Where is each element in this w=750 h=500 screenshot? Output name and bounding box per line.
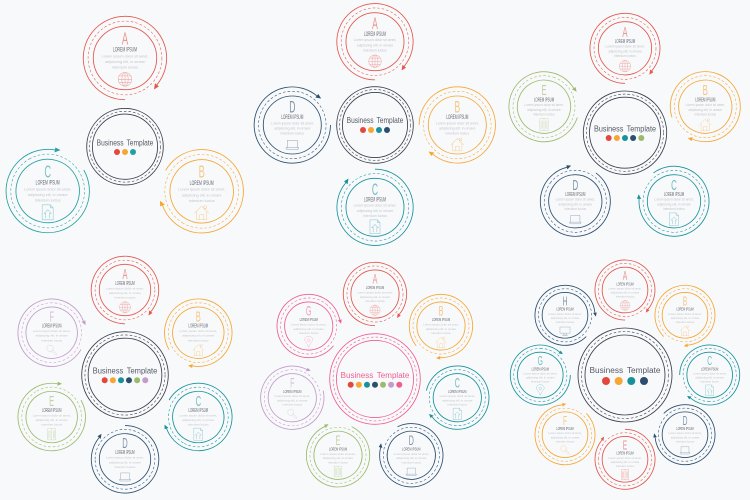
step G [510, 345, 570, 405]
step E: adipiscing elit, in ornare [36, 418, 68, 422]
step D: interdum luctus [402, 460, 422, 464]
step B: B [683, 295, 687, 309]
centre circle 6: Business Template [590, 366, 661, 375]
step A [595, 260, 655, 320]
step F: F [49, 309, 54, 325]
step D: D [289, 97, 295, 116]
step G: adipiscing elit, in ornare [526, 376, 555, 380]
step H [523, 273, 607, 358]
step G: LOREM IPSUM [300, 316, 318, 322]
step F: LOREM IPSUM [283, 388, 301, 394]
step B: interdum luctus [188, 338, 209, 342]
step A: Lorem ipsum dolor sit amet, [354, 38, 396, 42]
step G [264, 281, 353, 371]
step B: LOREM IPSUM [676, 307, 694, 312]
step A: adipiscing elit, in ornare [105, 60, 145, 64]
centre circle 3 [583, 91, 667, 174]
step E: LOREM IPSUM [329, 445, 347, 452]
panel: five-step diagram [500, 13, 749, 250]
step B: adipiscing elit, in ornare [439, 127, 476, 131]
centre circle 1: Business Template [97, 139, 154, 148]
step D: Lorem ipsum dolor sit amet, [394, 452, 429, 456]
step D: LOREM IPSUM [402, 445, 420, 452]
step B: interdum luctus [431, 331, 451, 335]
step C: Lorem ipsum dolor sit amet, [693, 371, 727, 375]
step A: Lorem ipsum dolor sit amet, [357, 290, 393, 294]
step E: Lorem ipsum dolor sit amet, [608, 456, 642, 460]
step B: adipiscing elit, in ornare [689, 108, 722, 112]
step B: interdum luctus [446, 132, 469, 136]
step B: Lorem ipsum dolor sit amet, [668, 312, 702, 316]
step D: LOREM IPSUM [565, 191, 586, 197]
step B: B [439, 304, 443, 319]
panel: six-step diagram [6, 256, 244, 493]
centre circle 4: Business Template [93, 366, 158, 376]
step H: adipiscing elit, in ornare [551, 316, 580, 320]
centre circle 4 [82, 332, 168, 418]
step C: Lorem ipsum dolor sit amet, [354, 204, 396, 208]
step B: Lorem ipsum dolor sit amet, [179, 329, 217, 333]
step B: LOREM IPSUM [432, 316, 450, 322]
step E: interdum luctus [533, 113, 555, 117]
step B: adipiscing elit, in ornare [426, 327, 456, 331]
step A: LOREM IPSUM [113, 47, 137, 54]
centre circle 2: Business Template [347, 116, 404, 125]
step D: Lorem ipsum dolor sit amet, [668, 431, 702, 435]
step B: B [199, 163, 205, 183]
step E: Lorem ipsum dolor sit amet, [524, 103, 564, 107]
step G: G [538, 355, 543, 369]
step E [595, 429, 655, 489]
step C: LOREM IPSUM [448, 388, 466, 394]
step C: interdum luctus [35, 199, 61, 203]
step H: LOREM IPSUM [556, 307, 574, 312]
step D: Lorem ipsum dolor sit amet, [556, 198, 595, 202]
step C: interdum luctus [188, 423, 209, 427]
step C: adipiscing elit, in ornare [442, 399, 473, 403]
step B [661, 63, 749, 151]
step F: Lorem ipsum dolor sit amet, [33, 329, 71, 333]
step C: LOREM IPSUM [664, 191, 684, 197]
step A: A [372, 14, 378, 33]
step D: adipiscing elit, in ornare [274, 127, 311, 131]
step F: interdum luctus [283, 403, 303, 407]
step A: Lorem ipsum dolor sit amet, [605, 45, 645, 49]
step H: Lorem ipsum dolor sit amet, [548, 312, 582, 316]
step E: interdum luctus [41, 423, 63, 427]
step D [369, 413, 454, 498]
step D: Lorem ipsum dolor sit amet, [271, 121, 314, 125]
step B: B [196, 309, 201, 325]
step C: C [707, 355, 712, 369]
step D: LOREM IPSUM [281, 114, 303, 122]
step A: adipiscing elit, in ornare [611, 291, 640, 295]
step A: interdum luctus [363, 48, 387, 52]
step D: adipiscing elit, in ornare [396, 456, 427, 460]
panel: four-step diagram [254, 4, 495, 245]
step F [6, 287, 98, 379]
step B: LOREM IPSUM [695, 96, 716, 103]
step A: LOREM IPSUM [615, 38, 635, 44]
step F: Lorem ipsum dolor sit amet, [275, 394, 310, 398]
step C [419, 360, 495, 436]
step G: adipiscing elit, in ornare [294, 327, 324, 331]
step C: LOREM IPSUM [701, 367, 718, 372]
step F: LOREM IPSUM [42, 323, 62, 329]
centre circle 5: Business Template [341, 371, 410, 380]
step E: E [49, 393, 54, 410]
step G: interdum luctus [531, 380, 550, 384]
step A: adipiscing elit, in ornare [109, 291, 141, 295]
step D: interdum luctus [564, 207, 587, 211]
step E: E [623, 439, 627, 453]
step C [625, 152, 723, 250]
step B: Lorem ipsum dolor sit amet, [686, 103, 725, 107]
step D: LOREM IPSUM [115, 449, 135, 455]
step C: C [671, 176, 677, 194]
step F: interdum luctus [41, 338, 63, 342]
step C: interdum luctus [363, 214, 387, 218]
step B [152, 287, 244, 379]
step C: interdum luctus [448, 403, 468, 407]
step B [419, 87, 495, 163]
step E: adipiscing elit, in ornare [323, 456, 353, 460]
step D: Lorem ipsum dolor sit amet, [106, 456, 144, 460]
panel: three-step diagram [0, 16, 259, 248]
step A: LOREM IPSUM [616, 282, 634, 287]
step A: Lorem ipsum dolor sit amet, [106, 286, 144, 290]
step F: F [290, 376, 295, 391]
step E [6, 371, 98, 463]
step A: A [122, 29, 128, 49]
step C: interdum luctus [700, 380, 720, 384]
step D: interdum luctus [281, 132, 304, 136]
step E: E [541, 81, 547, 99]
step G: Lorem ipsum dolor sit amet, [524, 371, 557, 375]
step G: LOREM IPSUM [532, 367, 549, 372]
step C: adipiscing elit, in ornare [657, 203, 691, 207]
step F: LOREM IPSUM [556, 426, 574, 431]
step E: adipiscing elit, in ornare [527, 108, 561, 112]
step A: LOREM IPSUM [115, 280, 135, 286]
step D: D [122, 436, 128, 452]
step E: adipiscing elit, in ornare [611, 460, 640, 464]
step C: interdum luctus [663, 207, 685, 211]
step A: A [373, 272, 378, 287]
step B [643, 273, 727, 358]
step D: D [409, 434, 414, 449]
step F: F [563, 415, 567, 429]
step E: LOREM IPSUM [42, 407, 62, 413]
step F: Lorem ipsum dolor sit amet, [548, 431, 582, 435]
step E: interdum luctus [328, 460, 348, 464]
step B: B [703, 81, 708, 99]
step F: adipiscing elit, in ornare [277, 399, 308, 403]
step C: adipiscing elit, in ornare [182, 418, 215, 422]
step A: LOREM IPSUM [366, 284, 384, 290]
step B: adipiscing elit, in ornare [182, 193, 222, 197]
step A: interdum luctus [365, 299, 385, 303]
step B [396, 281, 486, 371]
step D: LOREM IPSUM [676, 426, 694, 431]
step C [337, 169, 413, 245]
step B: B [454, 97, 460, 116]
step C: adipiscing elit, in ornare [695, 376, 724, 380]
step A: interdum luctus [614, 54, 636, 58]
step F [254, 360, 330, 436]
step C: LOREM IPSUM [36, 180, 60, 187]
panel: eight-step diagram [510, 260, 740, 489]
step E: interdum luctus [616, 464, 635, 468]
step B: adipiscing elit, in ornare [671, 316, 700, 320]
step C: Lorem ipsum dolor sit amet, [654, 198, 694, 202]
step B [145, 134, 259, 248]
step D [91, 426, 159, 493]
step A: adipiscing elit, in ornare [357, 43, 393, 47]
step E [296, 413, 380, 498]
step F: adipiscing elit, in ornare [36, 334, 68, 338]
step E: LOREM IPSUM [616, 451, 634, 456]
centre circle 3: Business Template [594, 125, 656, 134]
step A: A [623, 270, 627, 284]
step D: adipiscing elit, in ornare [559, 203, 592, 207]
step A [91, 256, 159, 324]
step B: Lorem ipsum dolor sit amet, [436, 121, 479, 125]
step D: D [683, 415, 687, 429]
step C: LOREM IPSUM [364, 196, 386, 204]
step D: adipiscing elit, in ornare [109, 460, 141, 464]
step B: adipiscing elit, in ornare [182, 334, 215, 338]
step G: Lorem ipsum dolor sit amet, [291, 322, 327, 326]
step A [590, 13, 660, 83]
step A: A [622, 23, 628, 41]
step B: LOREM IPSUM [446, 114, 468, 122]
step D [643, 392, 727, 477]
step E: Lorem ipsum dolor sit amet, [33, 413, 71, 417]
step H: H [563, 295, 567, 309]
step C: Lorem ipsum dolor sit amet, [179, 413, 217, 417]
step F: adipiscing elit, in ornare [551, 435, 580, 439]
step C: LOREM IPSUM [189, 407, 208, 413]
step B: Lorem ipsum dolor sit amet, [178, 188, 225, 192]
centre circle 1 [87, 108, 163, 185]
step C [0, 134, 105, 248]
step D: D [572, 176, 578, 194]
step B: interdum luctus [189, 199, 215, 203]
step A: interdum luctus [115, 296, 136, 300]
step A: adipiscing elit, in ornare [360, 295, 390, 299]
step A [343, 262, 407, 326]
step B: Lorem ipsum dolor sit amet, [423, 322, 459, 326]
step A: A [122, 266, 128, 283]
step A: LOREM IPSUM [364, 31, 386, 38]
step A: interdum luctus [112, 66, 138, 70]
step A: adipiscing elit, in ornare [608, 49, 642, 53]
step D [526, 152, 624, 250]
step D: interdum luctus [115, 465, 136, 469]
step F: interdum luctus [556, 439, 575, 443]
step C: adipiscing elit, in ornare [357, 209, 393, 213]
step E [500, 63, 588, 151]
centre circle 2 [337, 87, 413, 163]
step A [83, 16, 167, 100]
step E: Lorem ipsum dolor sit amet, [320, 452, 356, 456]
step A: Lorem ipsum dolor sit amet, [608, 286, 642, 290]
step C: C [44, 162, 51, 182]
step C: C [372, 180, 378, 199]
step A: Lorem ipsum dolor sit amet, [102, 54, 148, 58]
step C: Lorem ipsum dolor sit amet, [440, 394, 475, 398]
centre circle 5 [330, 334, 420, 424]
step C: adipiscing elit, in ornare [28, 193, 68, 197]
step E: LOREM IPSUM [534, 96, 554, 103]
step A: interdum luctus [616, 295, 635, 299]
step F [523, 392, 607, 477]
step H: interdum luctus [556, 320, 575, 324]
step D: interdum luctus [676, 439, 695, 443]
step B: interdum luctus [676, 320, 695, 324]
step E: E [336, 434, 340, 449]
step C: Lorem ipsum dolor sit amet, [24, 187, 71, 191]
step G: G [306, 304, 311, 319]
centre circle 6 [578, 328, 672, 422]
step D [254, 87, 330, 163]
step C: C [196, 393, 201, 410]
step C [152, 371, 244, 463]
step B: interdum luctus [694, 113, 717, 117]
step B: LOREM IPSUM [190, 180, 214, 187]
panel: seven-step diagram [254, 262, 495, 498]
step C [680, 345, 740, 405]
step B: LOREM IPSUM [189, 323, 208, 329]
step G: interdum luctus [299, 331, 319, 335]
step A [337, 4, 413, 80]
step C: C [455, 376, 460, 391]
step D: adipiscing elit, in ornare [671, 435, 700, 439]
